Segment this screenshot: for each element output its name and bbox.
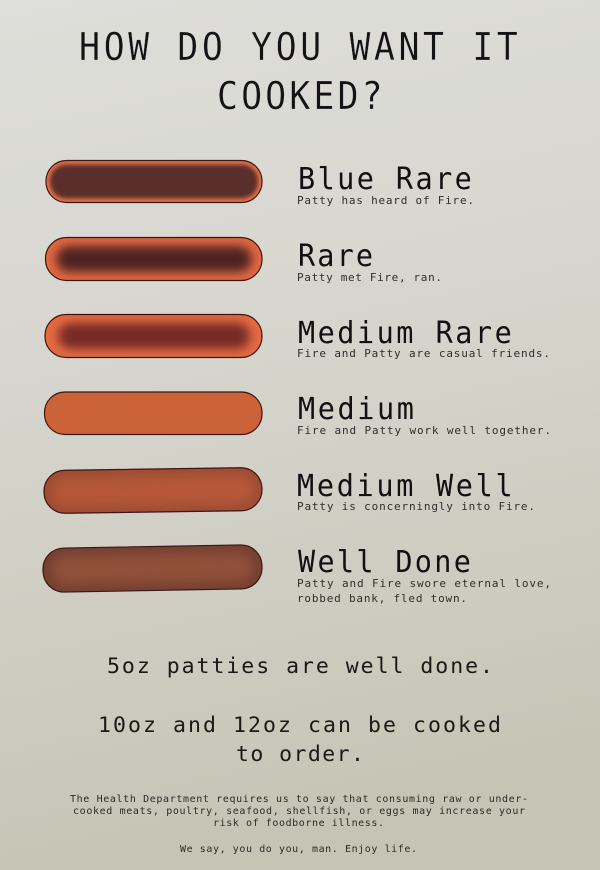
text: medium well: Medium Well (297, 468, 513, 503)
text: rare: Rare (298, 238, 373, 273)
text: medium well: Patty is concerningly into Fire. (297, 500, 535, 513)
text: rare (297, 238, 442, 284)
panel: medium rare patty (45, 314, 262, 358)
note: 5oz patties: 5oz patties are well done. (107, 654, 493, 679)
note: 10oz and 12oz: to order. (236, 742, 364, 767)
title: HOW DO YOU WANT IT (79, 25, 518, 69)
panel: well done patty (43, 545, 262, 592)
text: rare: Patty met Fire, ran. (297, 271, 442, 284)
note: 10oz and 12oz: 10oz and 12oz can be cooked (98, 713, 501, 738)
health disclaimer (70, 794, 528, 829)
text: well done (297, 544, 551, 605)
title: COOKED? (217, 74, 383, 118)
text: medium rare: Fire and Patty are casual friends. (297, 347, 550, 360)
health disclaimer: risk of foodborne illness. (213, 818, 384, 829)
text: blue rare: Patty has heard of Fire. (297, 194, 474, 207)
text: medium rare (297, 315, 550, 360)
title (79, 25, 518, 118)
text: medium: Fire and Patty work well together. (297, 424, 551, 437)
text: well done: Well Done (298, 544, 471, 579)
text: medium: Medium (298, 391, 414, 426)
text: well done: Patty and Fire swore eternal love, (297, 577, 551, 590)
text: medium rare: Medium Rare (298, 315, 512, 350)
panel: rare patty (46, 238, 262, 280)
panel: blue rare patty (46, 160, 262, 202)
panel: medium patty (44, 392, 262, 434)
closing line: We say, you do you, man. Enjoy life. (180, 844, 417, 855)
note: 10oz and 12oz (98, 713, 501, 767)
text: blue rare: Blue Rare (298, 161, 472, 196)
health disclaimer: The Health Department requires us to say that consuming raw or under- (70, 794, 528, 805)
text: well done: robbed bank, fled town. (297, 592, 467, 605)
text: medium (297, 391, 551, 437)
health disclaimer: cooked meats, poultry, seafood, shellfish, or eggs may increase your (73, 806, 525, 817)
panel: medium well patty (44, 467, 262, 514)
